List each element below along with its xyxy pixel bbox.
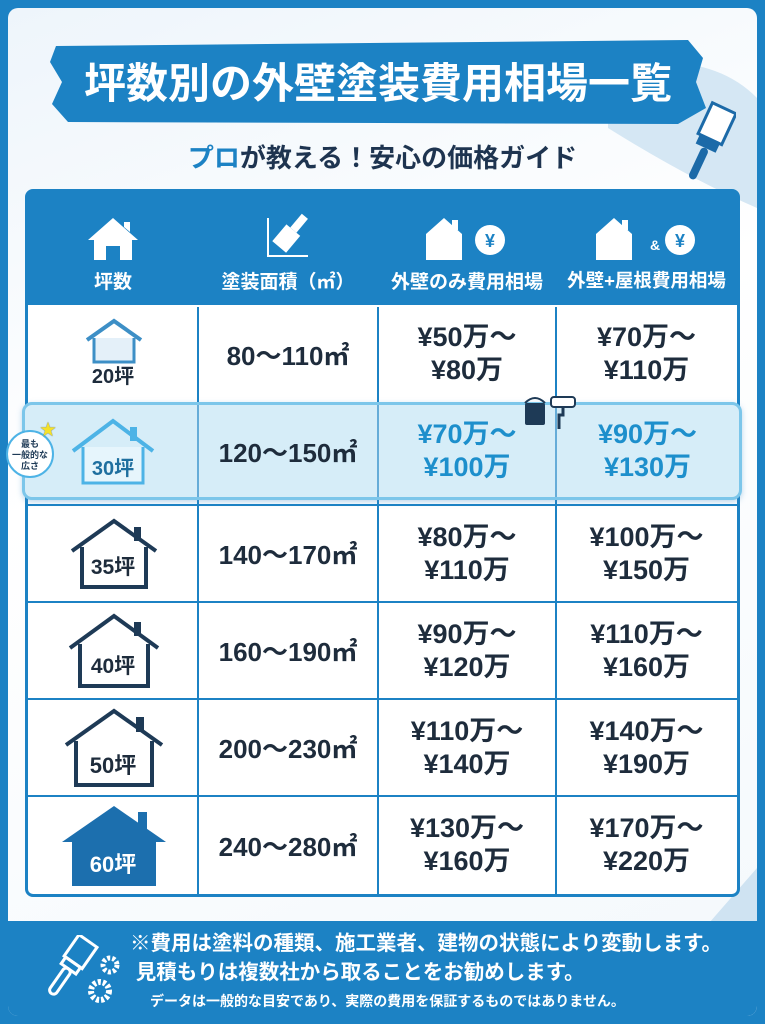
row 50坪 (64, 708, 704, 787)
header: 塗装面積 (221, 214, 354, 293)
callout: 最も一般的な広さ: 一般的な (12, 450, 48, 460)
header: 外壁+屋根費用相場: 外壁+屋根費用相場 (567, 270, 726, 291)
highlighted row 30坪: ¥70万〜 (417, 419, 517, 449)
row 40坪 (68, 614, 703, 688)
row 35坪: ¥80万〜 (417, 522, 517, 552)
row 40坪: ¥110万〜 (590, 618, 703, 648)
table (25, 189, 740, 897)
highlighted row 30坪: ¥90万〜 (598, 419, 697, 449)
row 50坪: ¥140万〜 (589, 716, 704, 746)
row 20坪: ¥50万〜 (417, 322, 517, 352)
subtitle: プロが教える！安心の価格ガイド (188, 143, 577, 173)
callout: 最も一般的な広さ (6, 430, 54, 478)
row 50坪: ¥140万 (423, 748, 511, 778)
header: 外壁のみ費用相場: 外壁のみ費用相場 (391, 272, 543, 293)
house icon 30坪 (72, 418, 154, 484)
row 20坪 (86, 318, 696, 388)
row 20坪: ¥80万 (431, 355, 503, 385)
highlighted row 30坪 (22, 402, 742, 500)
row 20坪: ¥110万 (604, 355, 689, 385)
row 35坪: ¥150万 (603, 554, 690, 584)
highlighted row 30坪: ¥100万 (423, 452, 511, 482)
row 35坪: ¥100万〜 (589, 522, 704, 552)
highlighted row 30坪: ¥130万 (604, 452, 691, 482)
row 50坪: ¥110万〜 (411, 716, 523, 746)
row 60坪: ¥170万〜 (589, 813, 704, 843)
row 60坪: 240〜280㎡ (219, 832, 357, 862)
footer disclaimer: データは一般的な目安であり、実際の費用を保証するものではありません。 (150, 993, 625, 1009)
row 40坪: 160〜190㎡ (219, 637, 357, 667)
header: 坪数 (88, 218, 138, 293)
row 20坪: 20坪 (92, 366, 134, 388)
header: 外壁+屋根費用相場: ¥ (675, 231, 685, 251)
row 35坪: 140〜170㎡ (219, 540, 357, 570)
row 60坪: ¥130万〜 (410, 813, 524, 843)
footer note: ※費用は塗料の種類、施工業者、建物の状態により変動します。 (130, 932, 722, 955)
row 35坪: 35坪 (91, 556, 135, 579)
header row (28, 192, 737, 306)
header: 外壁+屋根費用相場 (567, 218, 726, 291)
row 35坪: ¥110万 (424, 554, 510, 584)
icon: brush and gears (48, 935, 120, 1003)
footer note: 見積もりは複数社から取ることをお勧めします。 (136, 961, 585, 984)
header: 外壁のみ費用相場: ¥ (485, 231, 495, 251)
row 60坪: 60坪 (90, 852, 136, 877)
row 40坪: ¥160万 (603, 652, 690, 682)
row 40坪: ¥120万 (423, 652, 511, 682)
row 60坪 (62, 806, 704, 886)
row lines (28, 305, 737, 894)
highlighted row 30坪: 120〜150㎡ (219, 438, 357, 468)
header: 外壁のみ費用相場 (391, 218, 543, 293)
row 40坪: 40坪 (91, 655, 135, 678)
callout: 最も一般的な広さ: 広さ (21, 461, 39, 471)
icon: paint brush (689, 100, 736, 180)
header: 塗装面積: 塗装面積（㎡） (221, 272, 354, 293)
title text: 坪数別の外壁塗装費用相場一覧 (84, 60, 672, 107)
highlighted row 30坪: 30坪 (92, 458, 134, 480)
header: 外壁+屋根費用相場: & (650, 237, 660, 253)
callout: 最も一般的な広さ: 最も (21, 439, 39, 449)
icon: star: ★ (40, 422, 56, 439)
row 50坪: 200〜230㎡ (219, 734, 357, 764)
row 50坪: 50坪 (90, 753, 136, 778)
row 60坪: ¥160万 (423, 846, 511, 876)
footer (8, 921, 757, 1016)
row 35坪 (70, 518, 704, 589)
row 60坪: ¥220万 (603, 846, 690, 876)
row 20坪: ¥70万〜 (597, 322, 696, 352)
header: 坪数: 坪数 (94, 272, 132, 293)
row 40坪: ¥90万〜 (417, 618, 517, 648)
footer note (130, 932, 722, 984)
row 20坪: 80〜110㎡ (227, 340, 349, 370)
row 50坪: ¥190万 (603, 748, 690, 778)
icon: paint bucket and roller (524, 396, 576, 429)
title banner (50, 40, 706, 124)
